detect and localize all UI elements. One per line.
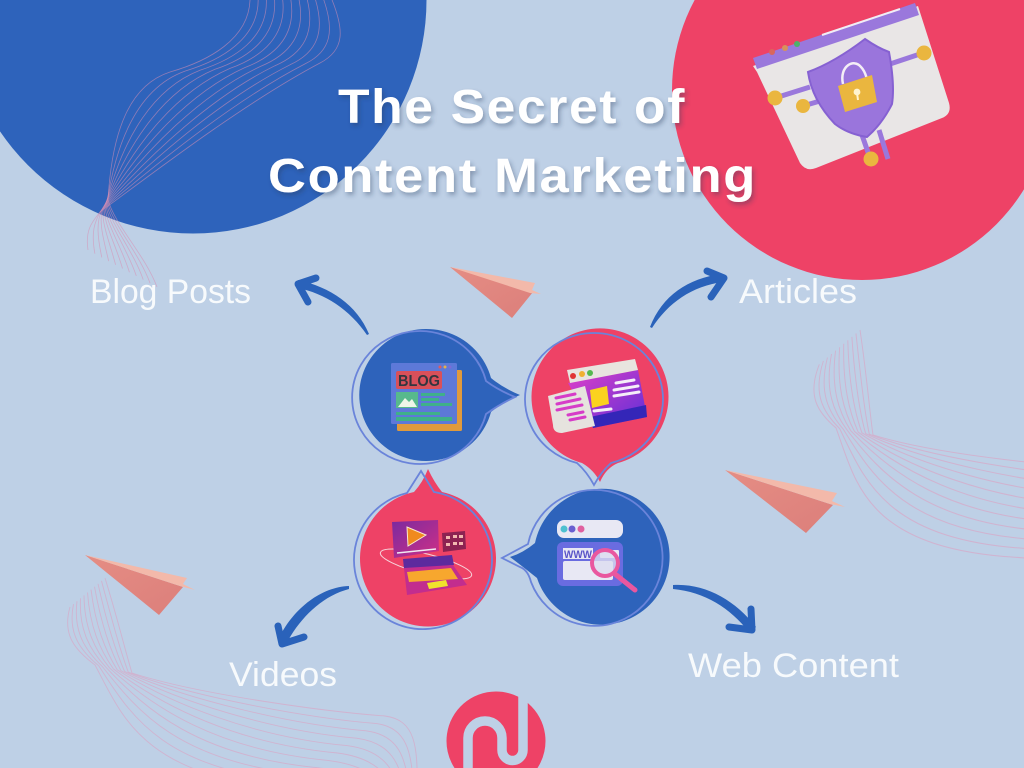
arrow: to articles bbox=[650, 271, 724, 328]
wave pattern: right bbox=[814, 330, 1024, 558]
icon: blog page bbox=[391, 363, 462, 431]
label: web content: Web Content bbox=[688, 647, 900, 685]
icon: laptop with video bbox=[378, 520, 474, 595]
label: blog posts: Blog Posts bbox=[90, 273, 251, 311]
connector nodes bbox=[768, 46, 932, 166]
icon: blog page: BLOG bbox=[398, 373, 440, 390]
window dots bbox=[769, 41, 800, 55]
speech bubble: articles bbox=[525, 328, 668, 485]
speech bubble: blog bbox=[352, 329, 520, 464]
shield bbox=[808, 39, 893, 137]
paper plane: left bbox=[85, 555, 195, 615]
label: videos: Videos bbox=[229, 656, 337, 694]
blue corner circle bbox=[0, 0, 426, 234]
speech bubble: videos bbox=[354, 469, 496, 629]
speech bubble: web content bbox=[502, 489, 670, 626]
logo bbox=[447, 692, 546, 768]
label: articles: Articles bbox=[739, 273, 857, 311]
wave pattern: top left bbox=[87, 0, 341, 287]
connectors bbox=[775, 53, 923, 159]
paper plane: top centre bbox=[450, 267, 541, 318]
paper plane: right bbox=[725, 470, 845, 533]
icon: browser pages bbox=[548, 359, 647, 433]
arrow: to blog posts bbox=[297, 278, 369, 335]
title: Content Marketing bbox=[268, 150, 757, 203]
wave pattern: bottom left bbox=[67, 578, 418, 768]
arrow: to web content bbox=[673, 585, 756, 632]
arrow: to videos bbox=[278, 586, 349, 644]
browser top bar bbox=[753, 3, 919, 69]
icon: www search: WWW bbox=[564, 549, 593, 561]
red corner circle bbox=[672, 0, 1024, 280]
icon: www search bbox=[557, 520, 635, 590]
title bbox=[268, 81, 757, 203]
browser window bbox=[753, 6, 950, 169]
padlock bbox=[838, 63, 877, 112]
title: The Secret of bbox=[338, 81, 686, 134]
icon: security shield browser bbox=[753, 3, 950, 169]
